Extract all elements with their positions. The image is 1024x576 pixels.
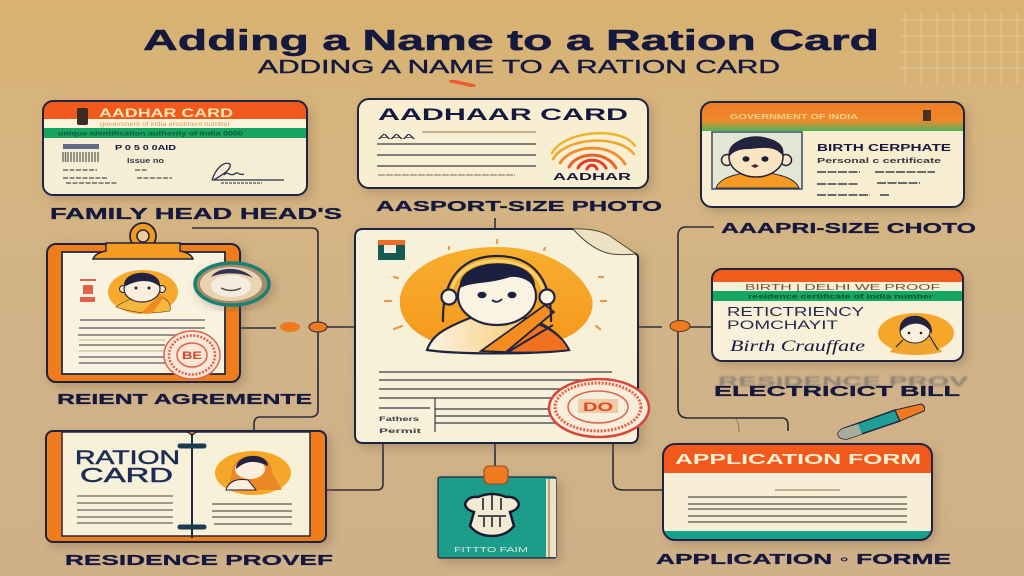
header text: BIRTH | DELHI WE PROOF [745,282,940,292]
stamp text: BE [182,350,202,362]
certificate heading: BIRTH CERPHATE [817,143,952,154]
form lines [379,372,612,432]
avatar [215,451,291,495]
subtitle: ADDING A NAME TO A RATION CARD [258,57,780,77]
clip [93,223,193,259]
red round stamp [549,379,649,437]
icon: pen [838,404,925,439]
connector lines [192,218,788,490]
label: residence proof faded: RESIDENCE PROV [718,373,969,389]
photo box [712,132,802,189]
avatar [108,270,178,314]
label: april-size photo: AAAPRI-SIZE CHOTO [721,220,977,237]
panel: aadhaar card, top left [43,101,307,195]
label: residence proof: RESIDENCE PROVEF [65,552,333,569]
card line 1: RETICTRIENCY [727,305,865,319]
tiny header text: GOVERNMENT OF INDIA [730,114,858,121]
national emblem [465,494,519,536]
green strip text: unique identification authority of india 0000 [58,130,244,138]
card heading: AADHAAR CARD [378,105,628,124]
document lines [78,320,205,363]
label: passport-size photo: AASPORT-SIZE PHOTO [376,198,663,215]
book title: RATION [75,448,180,469]
panel: ration card book [46,431,326,542]
handwriting: Birth Crauffate [730,338,865,355]
label: electricity bill: ELECTRICICT BILL [714,383,960,400]
left page lines [77,496,173,523]
title: Adding a Name to a Ration Card [143,25,879,57]
stamp text: DO [583,400,613,414]
stamp [164,331,220,379]
booklet text: FITTTO FAIM [454,547,528,554]
signature [212,163,284,180]
logo word: AADHAR [553,171,632,183]
panel: application form [663,444,932,540]
decorative grid top right [900,12,1024,84]
flag badge [378,240,405,260]
book title second line: CARD [80,465,173,487]
halo [400,247,593,340]
rings [180,446,204,527]
form lines [688,497,907,522]
icon: passport booklet [438,466,556,558]
form field text: Fathers [379,416,420,423]
red accent mark [451,81,474,86]
connector node right [670,320,690,332]
panel: aadhaar card, top left: Issue no [127,158,164,165]
form heading: APPLICATION FORM [675,451,921,468]
card heading: AADHAR CARD [99,106,233,120]
panel: birth certificate card [701,102,964,207]
label: family head: FAMILY HEAD HEAD'S [50,206,343,223]
panel: clipboard rent agreement [47,223,269,382]
sun rays [385,240,606,329]
right page lines [212,504,292,524]
card fields: P 0 5 0 0AID [115,143,177,152]
tiny header text: government of india enrolment number [100,122,230,128]
person [427,256,569,353]
label: application form: APPLICATION ◦ FORME [656,551,951,568]
certificate fields [817,172,935,195]
connector nodes left [280,322,327,332]
header emblem [923,110,931,121]
certificate subheading: Personal c certificate [817,158,941,165]
card line 2: POMCHAYIT [727,318,839,332]
barcode block [63,144,99,149]
emblem [77,108,88,125]
aadhaar logo arcs [552,133,635,169]
form lines [377,132,536,175]
panel: aadhaar card, top centre [358,99,648,188]
form field text: Permit [379,428,423,435]
red notes [80,279,96,302]
panel: central document [355,229,649,443]
tab [484,466,508,484]
avatar [878,313,954,355]
magnifier lens [195,263,269,305]
label: rent agreement: REIENT AGREMENTE [57,391,312,408]
panel: residence proof card [712,269,963,361]
small code: AAA [378,134,416,141]
green strip text: residence certificate of india number [748,294,934,300]
